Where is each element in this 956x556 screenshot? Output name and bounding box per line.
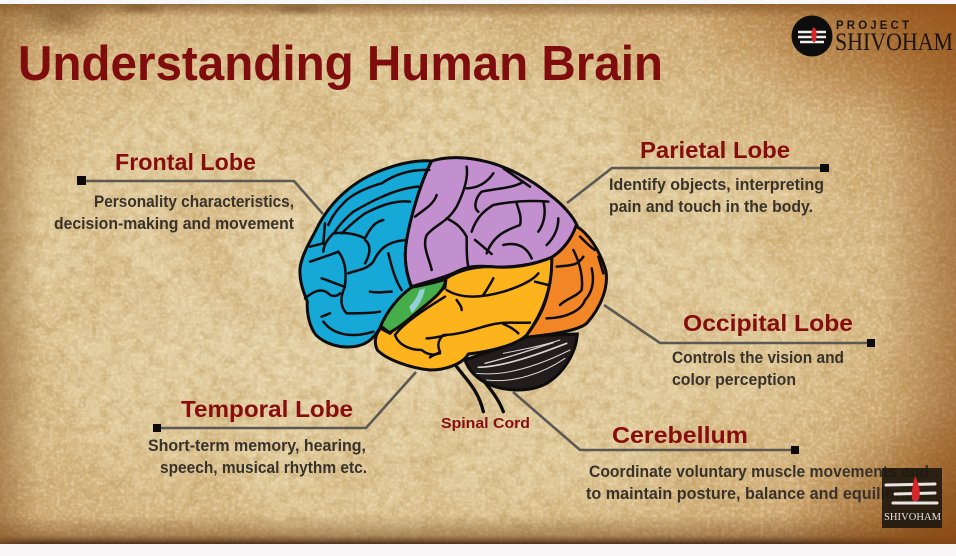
logo: Project Shivoham: PROJECT [836,20,912,32]
sulci: temporal [395,273,548,357]
heading: parietal lobe: Parietal Lobe [640,137,790,163]
description: frontal lobe [54,192,294,233]
description: temporal lobe: Short-term memory, hearing, [148,436,366,455]
parietal lobe [405,158,577,287]
description: parietal lobe [609,175,824,216]
sulci: occipital [547,237,603,318]
leader line: temporal lobe [157,372,416,428]
insula: green region [381,279,445,333]
marker: temporal lobe [153,424,161,432]
leader line: parietal lobe [567,168,824,203]
watermark logo [882,468,942,528]
description: frontal lobe: decision-making and movement [54,214,294,233]
cerebellum text [586,422,930,503]
leader line: occipital lobe [604,305,871,343]
temporal lobe [375,257,552,370]
frontal lobe text [54,149,294,233]
description: temporal lobe: speech, musical rhythm etc. [160,458,367,477]
leader line: cerebellum [513,392,795,450]
description: parietal lobe: Identify objects, interpreting [609,175,824,194]
marker: occipital lobe [867,339,875,347]
description: occipital lobe: color perception [672,370,796,389]
brain illustration [300,158,606,412]
description: cerebellum: Coordinate voluntary muscle movements and [589,462,929,481]
marker: cerebellum [791,446,799,454]
heading: temporal lobe: Temporal Lobe [181,396,353,422]
heading: occipital lobe: Occipital Lobe [683,310,853,336]
marker: frontal lobe [77,176,86,185]
leader line: frontal lobe [81,181,323,214]
marker: parietal lobe [820,164,829,172]
label: spinal cord: Spinal Cord [441,416,530,432]
description: frontal lobe: Personality characteristics, [94,192,294,211]
spinal cord [457,367,503,412]
description: cerebellum: to maintain posture, balance and equilibrium [586,484,930,503]
watermark logo: SHIVOHAM [884,512,942,523]
frontal lobe [300,161,432,347]
heading: cerebellum: Cerebellum [612,422,748,448]
description: parietal lobe: pain and touch in the body. [609,197,813,216]
description: temporal lobe [148,436,367,477]
occipital lobe text [672,310,853,389]
title: Understanding Human Brain [18,37,663,91]
cerebellum [465,334,577,390]
heading: frontal lobe: Frontal Lobe [115,149,256,175]
description: occipital lobe: Controls the vision and [672,348,844,367]
description: cerebellum [586,462,930,503]
sulci: parietal [415,167,558,270]
sulci: frontal [305,170,429,335]
description: occipital lobe [672,348,844,389]
occipital lobe [525,226,606,337]
temporal lobe text [148,396,367,477]
parietal lobe text [609,137,824,216]
insula highlight [409,288,425,313]
logo: Project Shivoham [792,16,953,56]
